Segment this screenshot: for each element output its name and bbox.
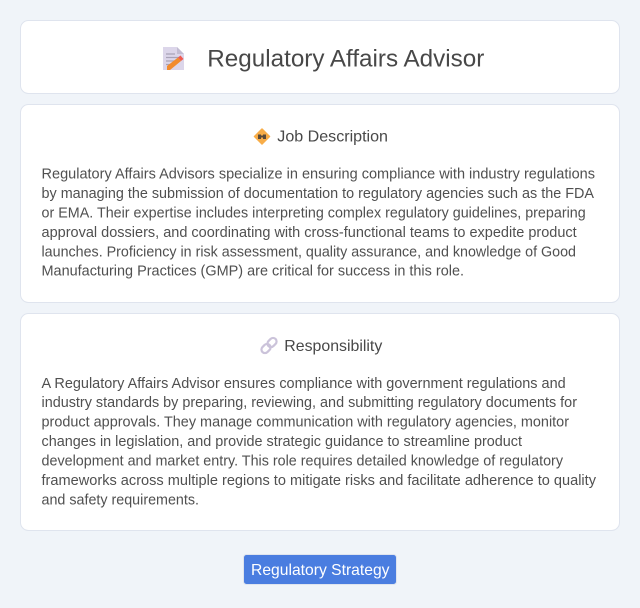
text block: job description: approval dossiers, and coordinating with cross-functional teams to expedite product — [42, 225, 577, 241]
text block: job description: or EMA. Their expertise includes interpreting complex regulatory guidelines, preparing — [42, 206, 586, 222]
text block: job description — [42, 166, 595, 280]
heading: responsibility: Responsibility — [284, 338, 382, 355]
icon: orange diamond — [254, 129, 270, 144]
text block: responsibility — [42, 376, 597, 508]
text block: responsibility: industry standards by preparing, reviewing, and submitting regulatory documents for — [42, 395, 577, 411]
text block: job description: by managing the submission of documentation to regulatory agencies such as the FDA — [42, 186, 594, 202]
title: Regulatory Affairs Advisor — [207, 46, 484, 72]
text block: responsibility: product approvals. They manage communication with regulatory agencies, monitor — [42, 415, 569, 431]
heading: job description: Job Description — [277, 128, 388, 146]
text block: responsibility: and safety requirements. — [42, 492, 199, 508]
text block: job description: Regulatory Affairs Advisors specialize in ensuring compliance with industry regulations — [42, 166, 595, 182]
text block: responsibility: A Regulatory Affairs Advisor ensures compliance with government regulations and — [42, 376, 566, 392]
icon: chain link — [260, 336, 278, 355]
text block: job description: Manufacturing Practices (GMP) are critical for success in this role. — [42, 264, 464, 280]
text block: responsibility: changes in legislation, and provide strategic guidance to streamline product — [42, 434, 522, 450]
button: regulatory strategy: Regulatory Strategy — [251, 562, 390, 579]
panel: responsibility — [20, 314, 620, 530]
text block: responsibility: frameworks across multiple regions to mitigate risks and facilitate adherence to quality — [42, 473, 597, 489]
panel: job description — [20, 104, 620, 302]
text block: responsibility: development and market entry. This role requires detailed knowledge of regulatory — [42, 454, 564, 470]
button: regulatory strategy — [244, 554, 396, 584]
text block: job description: launches. Proficiency in risk assessment, quality assurance, and knowledge of Good — [42, 244, 576, 260]
icon: document with pencil — [163, 47, 184, 70]
panel: header — [20, 20, 620, 94]
